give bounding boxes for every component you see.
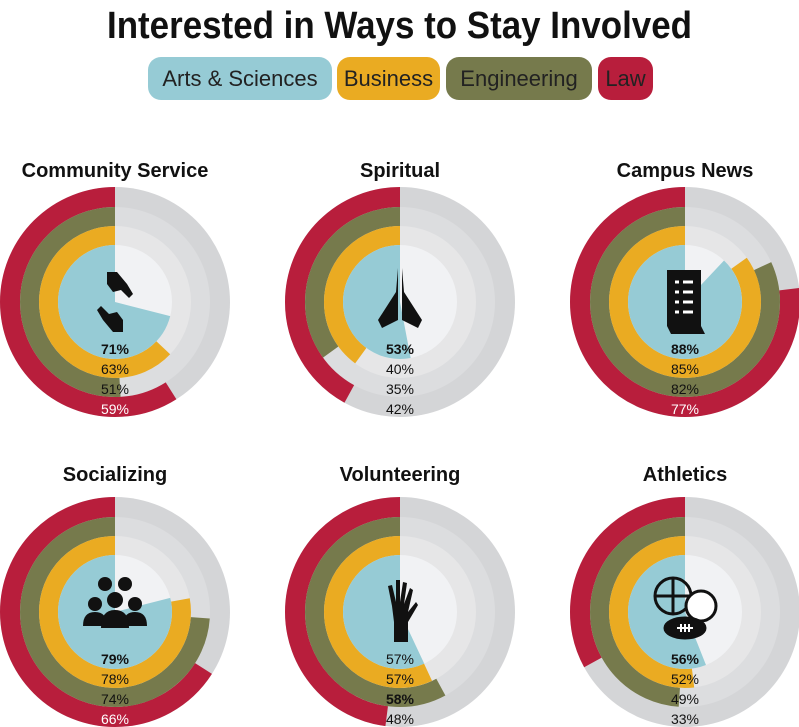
- legend: Law: [598, 57, 653, 100]
- chart: Socializing: [0, 464, 230, 727]
- legend: Business: [337, 57, 440, 100]
- chart: Spiritual: 35%: [386, 381, 414, 397]
- icon: sports balls: [655, 578, 716, 638]
- chart: Athletics: 33%: [671, 711, 699, 727]
- chart: Socializing: 66%: [101, 711, 129, 727]
- chart: Spiritual: 40%: [386, 361, 414, 377]
- chart: Volunteering: 57%: [386, 671, 414, 687]
- chart: Spiritual: 42%: [386, 401, 414, 417]
- chart: Spiritual: 53%: [386, 341, 415, 357]
- chart: Volunteering: 48%: [386, 711, 414, 727]
- chart: Volunteering: 58%: [386, 691, 415, 707]
- chart: Community Service: 63%: [101, 361, 129, 377]
- legend: [148, 57, 653, 100]
- chart: Community Service: Community Service: [22, 160, 208, 182]
- legend: Engineering: [446, 57, 592, 100]
- legend: Business: Business: [344, 66, 433, 91]
- chart: Campus News: [570, 160, 799, 417]
- chart: Socializing: Socializing: [63, 464, 167, 486]
- chart: Campus News: 82%: [671, 381, 699, 397]
- chart: Campus News: 88%: [671, 341, 700, 357]
- icon: group of people: [83, 577, 147, 628]
- chart: Athletics: 56%: [671, 651, 700, 667]
- chart: Athletics: [570, 464, 799, 727]
- chart: Campus News: 85%: [671, 361, 699, 377]
- icon: praying hands: [378, 268, 422, 328]
- chart: Community Service: 59%: [101, 401, 129, 417]
- icon: hands: [97, 272, 133, 332]
- chart: Socializing: 79%: [101, 651, 130, 667]
- chart: Socializing: 78%: [101, 671, 129, 687]
- chart: Athletics: 49%: [671, 691, 699, 707]
- chart: Volunteering: Volunteering: [340, 464, 460, 486]
- chart: Community Service: 51%: [101, 381, 129, 397]
- legend: Engineering: Engineering: [460, 66, 578, 91]
- icon: newspaper: [667, 270, 705, 334]
- chart: Campus News: Campus News: [617, 160, 753, 182]
- chart: Athletics: Athletics: [643, 464, 727, 486]
- chart: Community Service: [0, 160, 230, 417]
- legend: Arts & Sciences: [148, 57, 332, 100]
- chart: Socializing: 74%: [101, 691, 129, 707]
- icon: raised hand: [388, 580, 418, 642]
- chart: Spiritual: Spiritual: [360, 160, 440, 182]
- title: Interested in Ways to Stay Involved: [107, 5, 692, 47]
- chart: Spiritual: [285, 160, 515, 417]
- chart: Athletics: 52%: [671, 671, 699, 687]
- legend: Law: Law: [605, 66, 646, 91]
- chart: Volunteering: 57%: [386, 651, 414, 667]
- legend: Arts & Sciences: Arts & Sciences: [162, 66, 318, 91]
- chart: Community Service: 71%: [101, 341, 130, 357]
- chart: Campus News: 77%: [671, 401, 699, 417]
- chart: Volunteering: [285, 464, 515, 727]
